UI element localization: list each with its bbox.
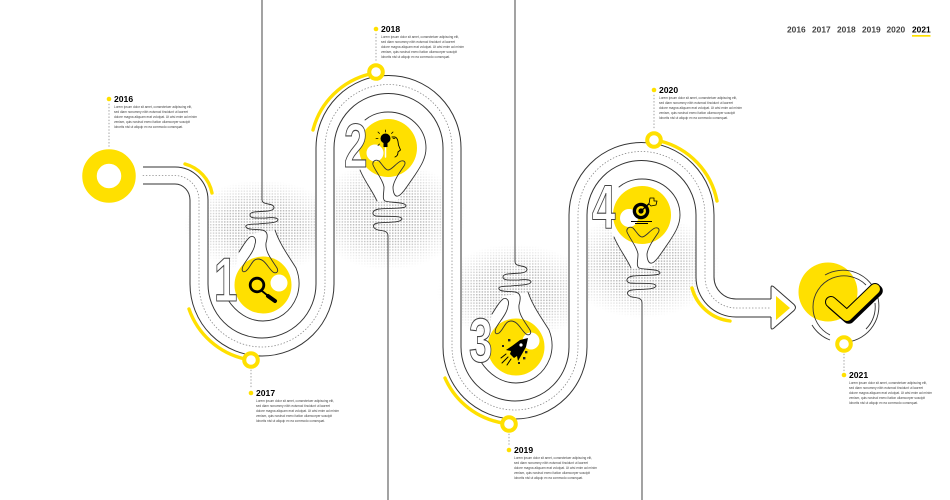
text block 2020: dolore magna aliquam erat volutpat. Ut wisi enim ad minim — [659, 106, 742, 110]
text block 2019: 2019 — [514, 445, 533, 455]
text block 2018: sed diam nonummy nibh euismod tincidunt ut laoreet — [381, 40, 455, 44]
bulb 3 with rocket — [469, 0, 553, 391]
text block 2018: dolore magna aliquam erat volutpat. Ut wisi enim ad minim — [381, 45, 464, 49]
text block 2021: veniam, quis nostrud exerci tation ullamcorper suscipit — [849, 396, 925, 400]
text block 2016 — [107, 94, 197, 129]
text block 2016: dolore magna aliquam erat volutpat. Ut wisi enim ad minim — [114, 115, 197, 119]
text block 2018: Lorem ipsum dolor sit amet, consectetuer adipiscing elit, — [381, 35, 459, 39]
text block 2021: Lorem ipsum dolor sit amet, consectetuer adipiscing elit, — [849, 381, 927, 385]
text block 2018 — [374, 24, 464, 59]
final check badge — [798, 262, 879, 342]
year navigation: 2021 — [912, 24, 931, 34]
text block 2017: dolore magna aliquam erat volutpat. Ut wisi enim ad minim — [256, 409, 339, 413]
text block 2019: lobortis nisl ut aliquip ex ea commodo consequat. — [514, 476, 583, 480]
number 3: 3 — [469, 307, 492, 376]
node 2019 — [502, 417, 516, 446]
node 2016 — [90, 104, 128, 196]
text block 2017 — [249, 388, 339, 423]
text block 2017: Lorem ipsum dolor sit amet, consectetuer adipiscing elit, — [256, 399, 334, 403]
node 2020 — [647, 95, 661, 147]
winding road — [143, 75, 775, 419]
text block 2021 — [842, 370, 932, 405]
text block 2021: 2021 — [849, 370, 868, 380]
text block 2016: lobortis nisl ut aliquip ex ea commodo consequat. — [114, 125, 183, 129]
text block 2017: lobortis nisl ut aliquip ex ea commodo consequat. — [256, 419, 325, 423]
icon: target — [631, 198, 657, 224]
text block 2017: sed diam nonummy nibh euismod tincidunt ut laoreet — [256, 404, 330, 408]
text block 2020: 2020 — [659, 85, 678, 95]
year navigation: 2020 — [886, 24, 905, 34]
text block 2016: sed diam nonummy nibh euismod tincidunt ut laoreet — [114, 110, 188, 114]
year navigation: 2016 — [787, 24, 806, 34]
text block 2019: dolore magna aliquam erat volutpat. Ut wisi enim ad minim — [514, 466, 597, 470]
text block 2016: Lorem ipsum dolor sit amet, consectetuer adipiscing elit, — [114, 105, 192, 109]
text block 2019 — [507, 445, 597, 480]
year navigation: 2019 — [862, 24, 881, 34]
halftone background: bulb 2 — [334, 171, 441, 266]
bulb 2 with idea head — [344, 112, 426, 500]
text block 2017: 2017 — [256, 388, 275, 398]
text block 2018: veniam, quis nostrud exerci tation ullamcorper suscipit — [381, 50, 457, 54]
bulb 1 with magnifier — [214, 0, 300, 329]
text block 2016: veniam, quis nostrud exerci tation ullamcorper suscipit — [114, 120, 190, 124]
text block 2019: veniam, quis nostrud exerci tation ullamcorper suscipit — [514, 471, 590, 475]
text block 2020: Lorem ipsum dolor sit amet, consectetuer adipiscing elit, — [659, 96, 737, 100]
halftone background: bulb 3 — [462, 249, 568, 332]
node 2021 — [837, 337, 851, 371]
icon: magnifier — [250, 278, 275, 301]
text block 2016: 2016 — [114, 94, 133, 104]
text block 2020 — [652, 85, 742, 120]
text block 2021: sed diam nonummy nibh euismod tincidunt ut laoreet — [849, 386, 923, 390]
year navigation: 2017 — [812, 24, 831, 34]
text block 2019: Lorem ipsum dolor sit amet, consectetuer adipiscing elit, — [514, 456, 592, 460]
halftone background: bulb 1 — [208, 185, 315, 264]
yellow progress arcs — [185, 74, 730, 423]
number 1: 1 — [214, 246, 237, 315]
icon: rocket — [501, 338, 528, 365]
text block 2018: 2018 — [381, 24, 400, 34]
icon: check mark — [831, 289, 877, 318]
icon: idea head — [376, 130, 400, 157]
year navigation: 2018 — [837, 24, 856, 34]
node 2017 — [244, 353, 258, 389]
bulb 4 with target — [592, 173, 680, 500]
node 2018 — [369, 34, 383, 79]
text block 2020: lobortis nisl ut aliquip ex ea commodo consequat. — [659, 116, 728, 120]
text block 2021: lobortis nisl ut aliquip ex ea commodo consequat. — [849, 401, 918, 405]
text block 2020: veniam, quis nostrud exerci tation ullamcorper suscipit — [659, 111, 735, 115]
text block 2020: sed diam nonummy nibh euismod tincidunt ut laoreet — [659, 101, 733, 105]
text block 2017: veniam, quis nostrud exerci tation ullamcorper suscipit — [256, 414, 332, 418]
text block 2021: dolore magna aliquam erat volutpat. Ut wisi enim ad minim — [849, 391, 932, 395]
arrow head — [771, 286, 796, 329]
number 4: 4 — [592, 173, 616, 242]
halftone background: bulb 4 — [588, 224, 698, 314]
text block 2019: sed diam nonummy nibh euismod tincidunt ut laoreet — [514, 461, 588, 465]
year navigation — [787, 24, 931, 37]
number 2: 2 — [344, 112, 367, 181]
text block 2018: lobortis nisl ut aliquip ex ea commodo consequat. — [381, 55, 450, 59]
